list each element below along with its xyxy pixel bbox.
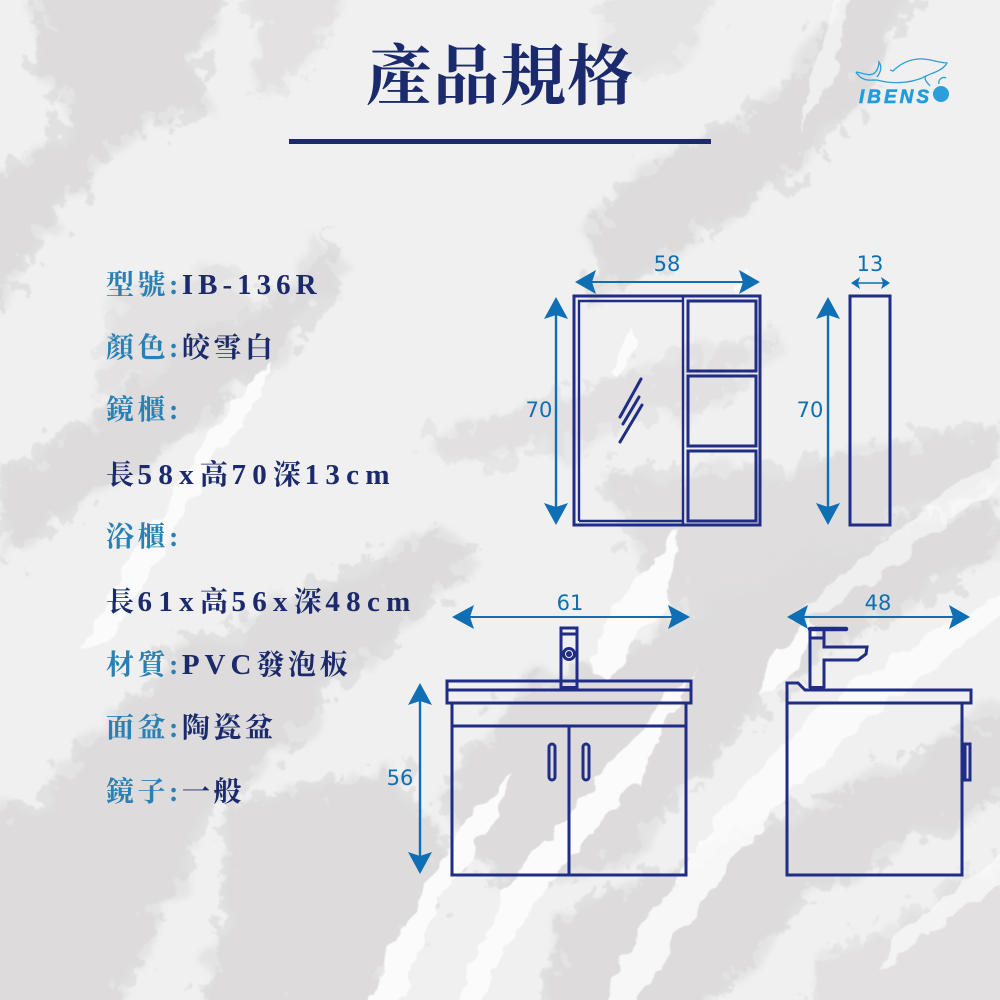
dimension: 70 side: 70 xyxy=(797,398,823,422)
dimension: 48: 48 xyxy=(865,591,891,615)
spec line: basin: 面盆:陶瓷盆 xyxy=(106,713,276,744)
dimension: 70 side xyxy=(797,297,840,525)
spec line: mirror cabinet heading: 鏡櫃: xyxy=(106,395,182,426)
dimension: 70 front xyxy=(526,297,568,525)
spec line: mirror: 鏡子:一般 xyxy=(106,777,245,808)
faucet side xyxy=(809,629,867,688)
spec line: model: 型號:IB-136R xyxy=(106,269,322,301)
dimension: 56 xyxy=(387,683,432,874)
dimension: 13 xyxy=(851,252,890,289)
mirror cabinet front view xyxy=(574,296,760,525)
spec line: vanity heading: 浴櫃: xyxy=(106,522,182,553)
title underline xyxy=(289,139,711,144)
dimension: 58 xyxy=(575,252,760,294)
logo: IBENSO xyxy=(856,58,949,106)
mirror cabinet side view xyxy=(850,296,890,525)
dimension: 48 xyxy=(787,591,970,629)
dimension: 61: 61 xyxy=(557,591,583,615)
vanity front view xyxy=(447,628,691,875)
spec line: vanity size: 長61x高56x深48cm xyxy=(106,586,417,618)
dimension: 13: 13 xyxy=(857,252,883,276)
vanity side view xyxy=(787,629,971,875)
spec line: mirror cabinet size: 長58x高70深13cm xyxy=(106,459,396,491)
dimension: 70 front: 70 xyxy=(526,398,552,422)
spec line: colour: 顏色:皎雪白 xyxy=(106,333,276,364)
dimension: 56: 56 xyxy=(387,766,413,790)
title: 產品規格 xyxy=(366,41,634,114)
dimension: 61 xyxy=(452,591,690,629)
spec line: material: 材質:PVC發泡板 xyxy=(106,649,351,681)
faucet front xyxy=(560,628,578,689)
dimension: 58: 58 xyxy=(654,252,680,276)
